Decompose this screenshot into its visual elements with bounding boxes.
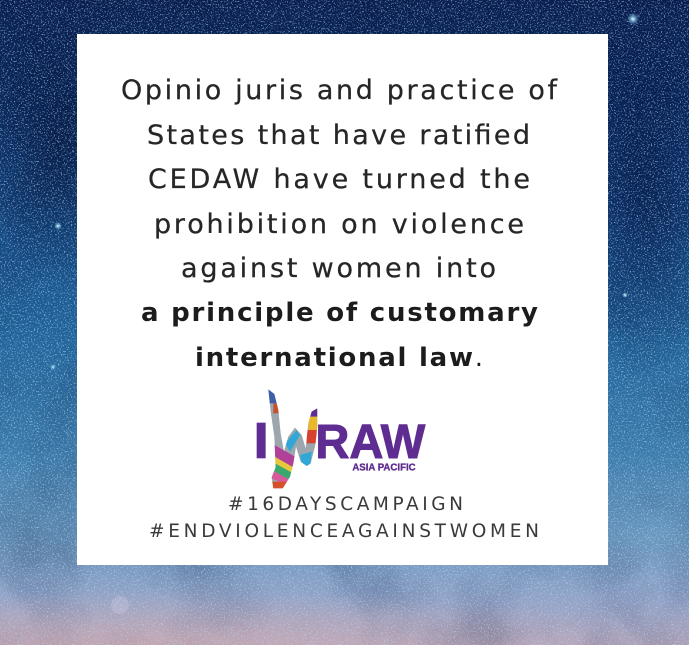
- logo feather W: [268, 390, 318, 488]
- main statement: against women into: [181, 253, 496, 284]
- main statement: international law.: [195, 343, 483, 373]
- logo letter I: [257, 423, 266, 458]
- logo: IWRAW Asia Pacific: [257, 387, 425, 493]
- main statement: a principle of customary: [141, 298, 538, 328]
- logo tagline: ASIA PACIFIC: [352, 463, 416, 474]
- hashtags: #16DAYSCAMPAIGN: [228, 494, 463, 515]
- white panel: [77, 34, 608, 565]
- main statement: Opinio juris and practice of: [121, 75, 558, 106]
- main statement: prohibition on violence: [154, 209, 524, 240]
- hashtags: #ENDVIOLENCEAGAINSTWOMEN: [149, 521, 539, 542]
- hashtags: [149, 494, 539, 542]
- main statement: States that have ratified: [147, 120, 530, 151]
- main statement: [121, 75, 558, 373]
- logo letters RAW: RAW: [315, 415, 425, 469]
- main statement: CEDAW have turned the: [148, 164, 530, 195]
